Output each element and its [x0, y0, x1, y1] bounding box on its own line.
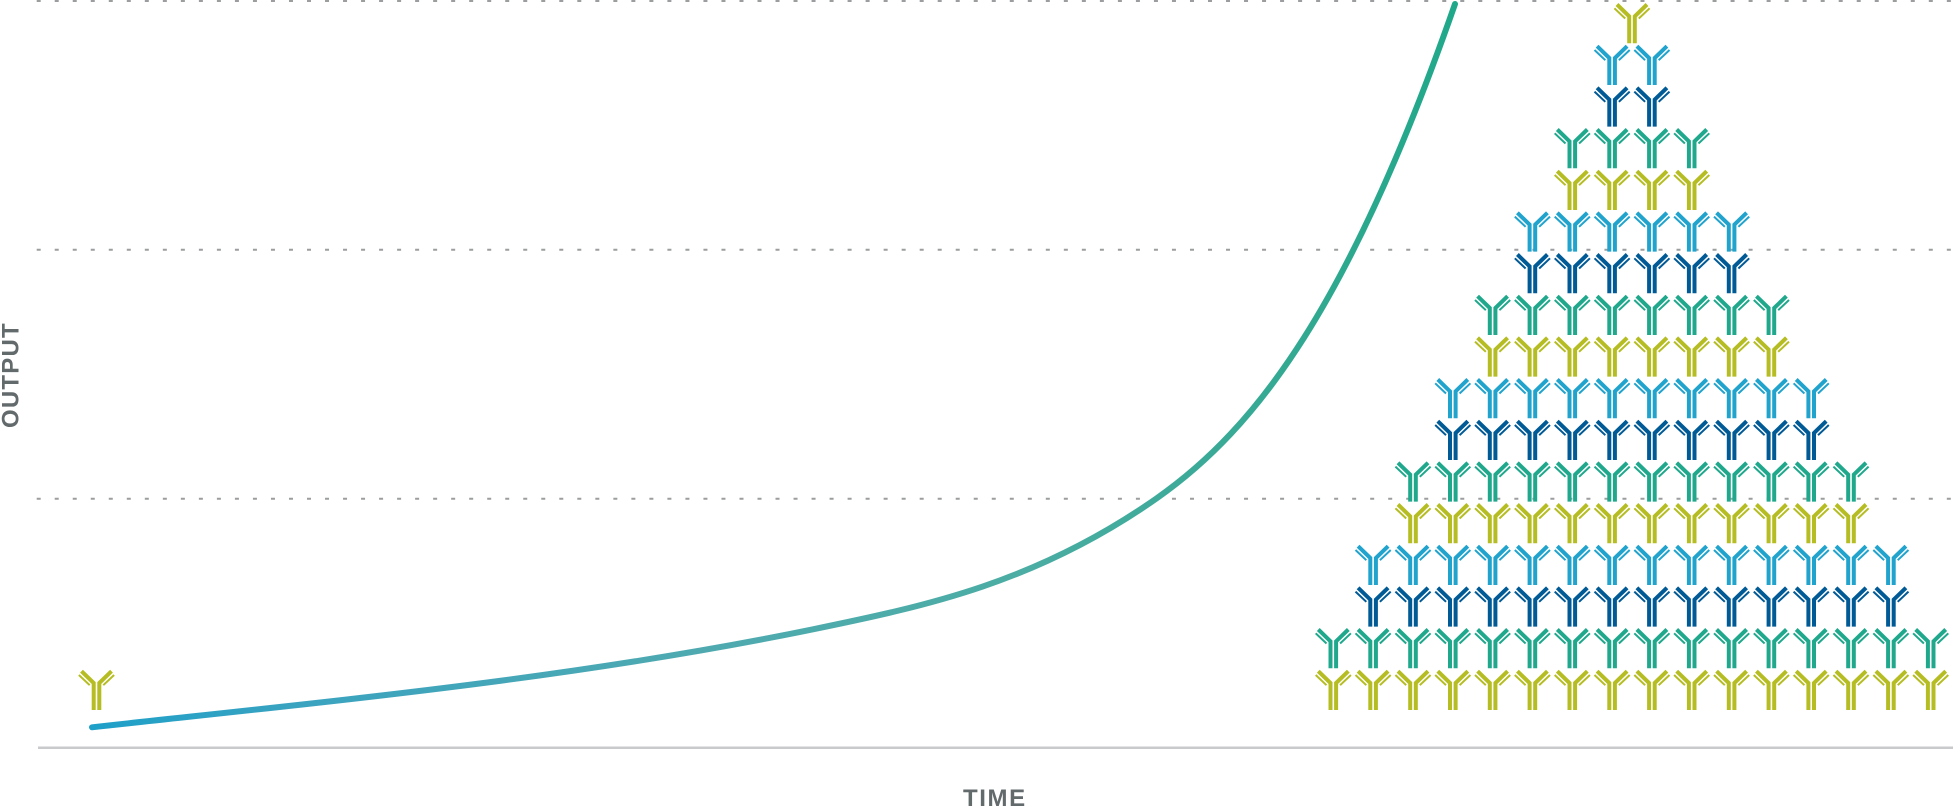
row 4: teal [1555, 130, 1709, 168]
row 12: teal [1395, 463, 1869, 502]
growth curve [92, 4, 1455, 727]
icon: single starting antibody [79, 671, 114, 710]
row 13: yellow [1395, 504, 1869, 543]
row 7: navy [1515, 254, 1749, 293]
row 14: light blue [1356, 546, 1908, 585]
row 6: light blue [1515, 213, 1749, 252]
row 9: yellow [1475, 338, 1789, 377]
dotted gridlines [37, 1, 1954, 499]
antibody pyramid [1316, 4, 1948, 710]
row 8: teal [1475, 296, 1789, 335]
row 3: navy [1594, 88, 1670, 127]
row 17: yellow [1316, 671, 1948, 710]
row 11: navy [1435, 421, 1829, 460]
row 10: light blue [1435, 380, 1829, 418]
row 5: yellow [1555, 171, 1709, 210]
x axis line [38, 746, 1953, 749]
row 16: teal [1316, 630, 1948, 668]
row 15: navy [1356, 588, 1908, 627]
row 1: yellow [1614, 4, 1650, 43]
row 2: light blue [1594, 46, 1670, 85]
